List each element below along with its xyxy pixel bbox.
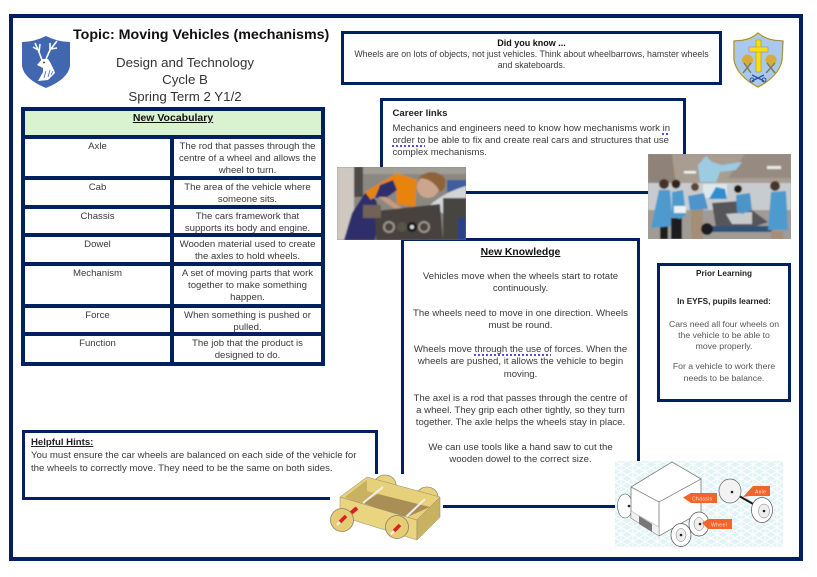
new knowledge text: wheels are pushed, it allows the vehicle to begin [418,356,623,367]
term: axle [25,139,170,176]
panel: vocabulary table [21,107,325,366]
vocabulary heading [25,111,321,135]
new knowledge text [413,271,628,465]
subtitle block: Cycle B [162,72,208,87]
new knowledge text: together. The axle helps the wheels stay in place. [416,417,625,428]
definition: cab: someone sits. [218,194,277,204]
new knowledge text: Vehicles move when the wheels start to rotate [423,271,618,282]
illustration: wooden model car [330,474,443,540]
icon: church school crest [733,32,784,88]
subtitle block: Spring Term 2 Y1/2 [128,89,242,104]
term: chassis [25,209,170,233]
subtitle block: Design and Technology [116,55,254,70]
definition: mechanism: A set of moving parts that work [182,268,313,278]
icon: school shield with stag [22,36,70,88]
term: function: Function [79,338,116,348]
new knowledge text: Wheels move through the use of forces. When the [414,344,627,355]
term: mechanism [25,266,170,304]
new knowledge text: continuously. [493,283,548,294]
prior learning balance text [673,361,775,382]
prior learning text: move properly. [696,340,752,350]
subtitle block [116,55,254,104]
did you know text: and skateboards. [498,60,565,70]
definition: mechanism [174,266,321,304]
prior learning balance text: needs to be balance. [684,372,764,382]
panel: new knowledge [401,238,640,508]
definition: dowel [174,237,321,262]
term: function [25,336,170,362]
term: cab: Cab [89,182,106,192]
definition: chassis [174,209,321,233]
panel: helpful hints [22,430,378,500]
prior learning heading: Prior Learning [696,269,752,278]
photo: engineers around vehicle chassis [648,154,791,239]
label: chassis [683,493,717,503]
prior learning text [669,318,779,350]
term: dowel: Dowel [84,238,111,250]
title: Topic: Moving Vehicles (mechanisms) [73,27,329,43]
panel: career links [380,98,686,194]
definition: function: designed to do. [215,350,280,360]
panel: prior learning [657,263,791,402]
definition: cab [174,180,321,205]
helpful hints heading: Helpful Hints: [31,436,93,448]
definition: dowel: the axles to hold wheels. [195,250,300,262]
definition: mechanism: together to make something [188,280,307,290]
term: axle: Axle [88,140,107,152]
term: force [25,308,170,332]
definition: mechanism: happen. [230,292,265,302]
term: mechanism: Mechanism [73,268,122,278]
label: axle: Axle [755,490,766,496]
helpful hints text [31,450,356,474]
label: axle [743,486,770,497]
prior learning subheading: In EYFS, pupils learned: [677,297,771,306]
photo: mechanic working on engine [337,167,466,240]
label: wheel [702,519,732,529]
new knowledge text: moving. [504,369,537,380]
definition: function [174,336,321,362]
new knowledge text: must be round. [488,320,552,331]
term: dowel [25,237,170,262]
new knowledge text: We can use tools like a hand saw to cut the [428,442,613,453]
definition: force [174,308,321,332]
term: force: Force [85,310,110,320]
career links text: Mechanics and engineers need to know how mechanisms work in [392,123,670,134]
new knowledge text: wooden dowel to the correct size. [449,454,592,465]
did you know text [354,49,709,70]
definition: cab: The area of the vehicle where [184,182,311,192]
definition: axle: centre of a wheel and allows the [179,152,316,164]
did you know text: Wheels are on lots of objects, not just vehicles. Think about wheelbarrows, hamster wheels [354,49,709,59]
career links heading: Career links [392,108,447,119]
term: cab [25,180,170,205]
vocabulary heading: New Vocabulary [133,112,213,124]
prior learning text: the vehicle to be able to [678,330,770,340]
prior learning balance text: For a vehicle to work there [673,361,775,371]
illustration: vehicle diagram with chassis, axle and wheel labels [615,461,783,547]
new knowledge text: The wheels need to move in one direction. Wheels [413,308,628,319]
label: chassis: Chassis [692,496,713,502]
definition: axle [174,139,321,176]
term: chassis: Chassis [80,210,115,222]
did you know heading: Did you know ... [497,38,566,48]
career links text [392,123,670,158]
new knowledge text: The axel is a rod that passes through the centre of [414,393,627,404]
new knowledge heading: New Knowledge [481,246,560,258]
definition: force: When something is pushed or [184,310,311,320]
helpful hints text: the wheels to correctly move. They need to be the same on both sides. [31,463,333,474]
definition: axle: The rod that passes through the [180,140,316,152]
prior learning text: Cars need all four wheels on [669,318,779,328]
career links text: order to be able to fix and create real cars and structures that use [392,135,669,146]
definition: function: The job that the product is [192,338,303,348]
new knowledge text: a wheel. They grip each other tightly, so they turn [416,405,625,416]
definition: chassis: The cars framework that [196,210,299,222]
panel: did you know [341,31,722,85]
definition: dowel: Wooden material used to create [180,238,315,250]
helpful hints text: You must ensure the car wheels are balanced on each side of the vehicle for [31,450,356,461]
career links text: complex mechanisms. [392,147,487,158]
label: wheel: Wheel [711,522,727,528]
definition: axle: wheel to turn. [219,164,276,176]
